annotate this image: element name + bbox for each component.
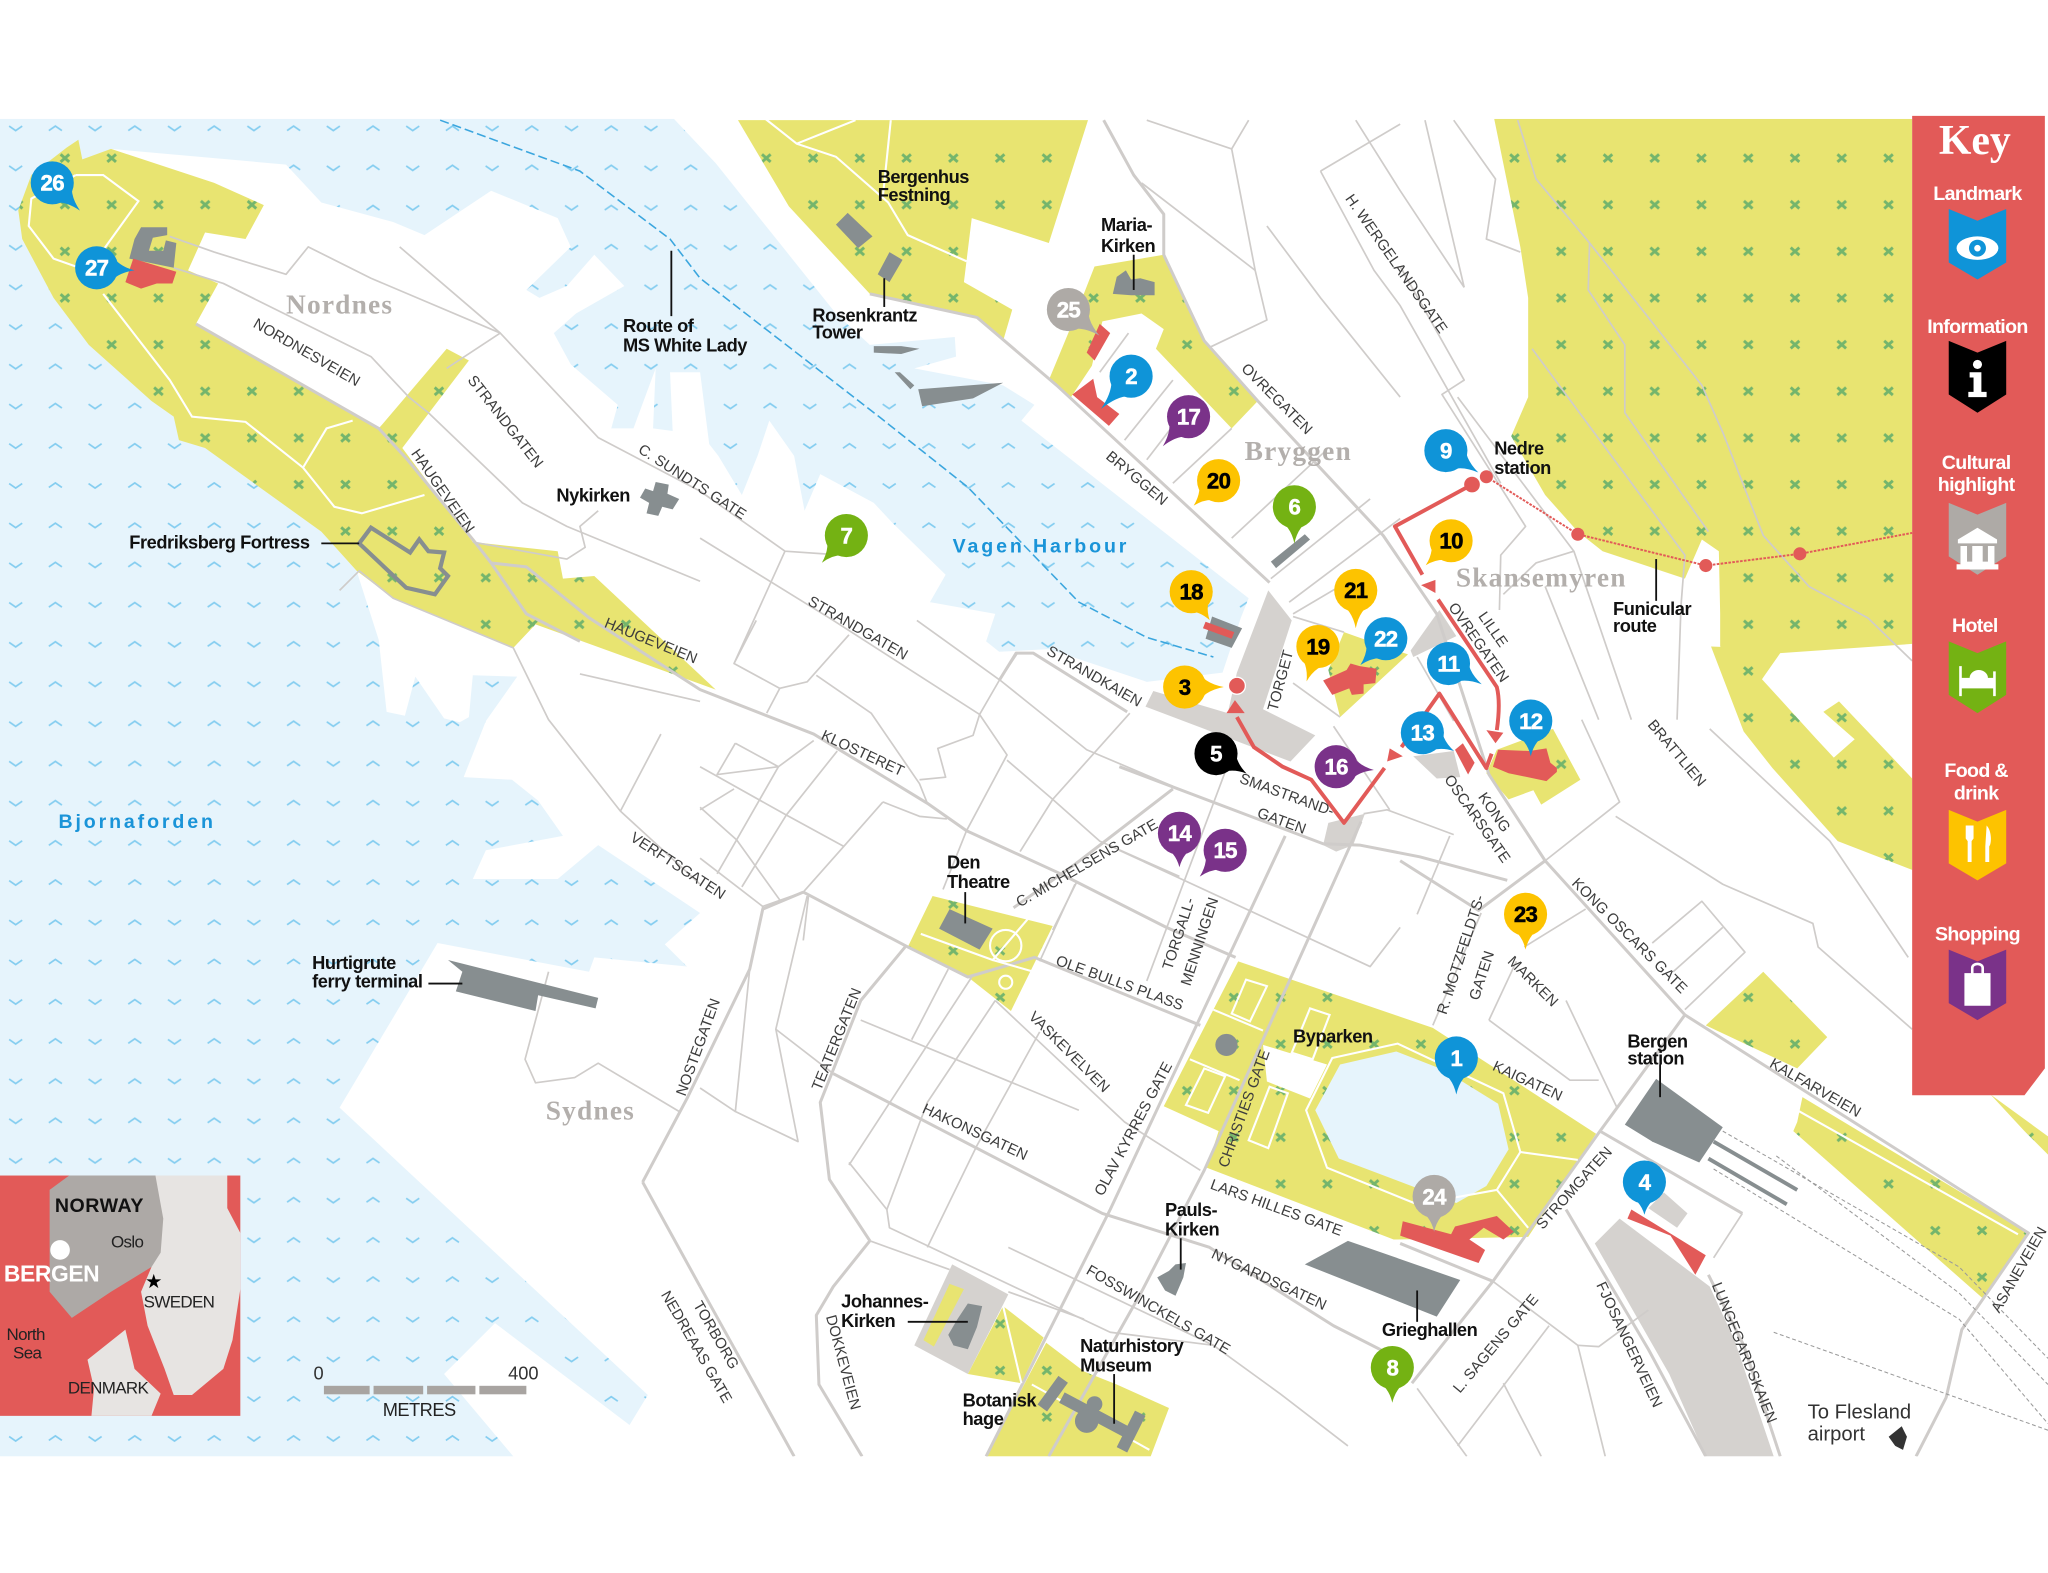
landmark labels: Festning bbox=[878, 184, 950, 205]
pin 12: 12 bbox=[1519, 709, 1543, 734]
street labels: C. SUNDTS GATE bbox=[635, 441, 749, 523]
key item: Landmark bbox=[1933, 183, 2022, 280]
street labels: R. MOTZFELDTS- bbox=[1434, 893, 1488, 1016]
street labels: KALFARVEIEN bbox=[1767, 1055, 1864, 1121]
street labels: BRATTLIEN bbox=[1644, 717, 1709, 790]
building: fish market grey bbox=[1206, 617, 1242, 648]
park: Bergenhus bbox=[738, 120, 1088, 341]
key item: Food and drink: Food & bbox=[1944, 760, 2008, 782]
Denmark bbox=[88, 1330, 161, 1416]
key item: Landmark: Landmark bbox=[1933, 183, 2022, 205]
landmark labels: Maria- bbox=[1101, 214, 1152, 235]
pin 8: 8 bbox=[1386, 1355, 1398, 1380]
place name labels: Bryggen bbox=[1245, 436, 1352, 466]
lake in Byparken bbox=[1315, 1051, 1509, 1203]
ferry route of MS White Lady bbox=[440, 120, 1213, 657]
pin 4: 4 bbox=[1639, 1170, 1652, 1195]
pin 7: 7 bbox=[841, 523, 853, 548]
pin 17: 17 bbox=[1177, 405, 1201, 430]
street labels: L. SAGENS GATE bbox=[1450, 1291, 1542, 1396]
street labels: OVREGATEN bbox=[1238, 360, 1316, 438]
street labels: LARS HILLES GATE bbox=[1208, 1176, 1345, 1240]
pin 22 bbox=[1347, 617, 1407, 678]
red highlighted buildings bbox=[125, 259, 1706, 1275]
street labels: MENNINGEN bbox=[1178, 895, 1222, 988]
street labels: NEDREAAS GATE bbox=[657, 1288, 735, 1406]
pin 24 bbox=[1413, 1175, 1456, 1232]
landmark labels: Tower bbox=[812, 321, 863, 342]
pin 4 bbox=[1623, 1161, 1666, 1215]
pin 19: 19 bbox=[1306, 634, 1330, 659]
pin 7 bbox=[808, 514, 868, 575]
street labels: OLAV KYRRES GATE bbox=[1091, 1059, 1176, 1199]
park: eastern hillside bbox=[1494, 119, 1912, 679]
street labels: LILLE bbox=[1474, 609, 1511, 651]
street labels: VERFTSGATEN bbox=[627, 829, 728, 903]
pin 16: 16 bbox=[1324, 755, 1348, 780]
yellow strip at Johannes-Kirken bbox=[923, 1284, 964, 1347]
key item: Cultural highlight: Cultural bbox=[1942, 452, 2011, 474]
park: block by 12 bbox=[1486, 729, 1580, 805]
station rails bbox=[1714, 1142, 1797, 1190]
pin 26: 26 bbox=[41, 171, 64, 196]
landmark labels: Johannes- bbox=[841, 1290, 929, 1311]
landmark labels: Byparken bbox=[1293, 1025, 1373, 1046]
street labels: HAKONSGATEN bbox=[920, 1100, 1030, 1164]
building: pier at 6 bbox=[1271, 534, 1310, 568]
building: Rosenkrantz Tower bbox=[878, 252, 903, 282]
icon: bag bbox=[1964, 963, 1991, 1006]
street labels: OLE BULLS PLASS bbox=[1054, 952, 1186, 1014]
Sweden label: SWEDEN bbox=[144, 1292, 214, 1311]
icon: plane bbox=[1889, 1426, 1907, 1450]
key item: Food and drink: drink bbox=[1954, 782, 1999, 804]
park: corner sliver bbox=[1991, 1095, 2048, 1155]
Bergen label: BERGEN bbox=[4, 1260, 99, 1286]
North Sea label: North bbox=[7, 1325, 45, 1344]
Sweden bbox=[141, 1176, 240, 1395]
airport note bbox=[1808, 1401, 1911, 1450]
street labels: OSCARSGATE bbox=[1440, 772, 1514, 866]
railway tracks dashed bbox=[1714, 1131, 2048, 1430]
street labels: SMASTRAND- bbox=[1237, 770, 1336, 820]
key item: Hotel: Hotel bbox=[1952, 615, 1998, 637]
park: Kalfarveien band bbox=[1793, 1097, 2028, 1298]
park: Nordnes peninsula bbox=[18, 140, 716, 690]
pin 23 bbox=[1504, 893, 1547, 950]
pin 11 bbox=[1427, 642, 1491, 700]
pin 21: 21 bbox=[1344, 578, 1368, 603]
roads bbox=[170, 120, 2028, 1456]
place name labels: Nordnes bbox=[286, 289, 393, 319]
building: Fredriksberg Fortress outline bbox=[359, 528, 448, 594]
street labels: HAUGEVEIEN bbox=[407, 446, 478, 536]
key item: Cultural highlight: highlight bbox=[1938, 474, 2016, 496]
star: Stockholm: ★ bbox=[145, 1271, 163, 1293]
landmark labels: route bbox=[1613, 615, 1657, 636]
station rails bbox=[1708, 1159, 1787, 1204]
landmark labels: station bbox=[1627, 1048, 1684, 1069]
street labels: FOSSWINCKELS GATE bbox=[1083, 1262, 1233, 1358]
street labels: VASKEVELVEN bbox=[1025, 1008, 1113, 1096]
grey buildings bbox=[129, 213, 1797, 1450]
pin 27: 27 bbox=[85, 256, 109, 281]
key panel bbox=[1912, 116, 2045, 1095]
pin 3: 3 bbox=[1179, 675, 1191, 700]
place name labels: Skansemyren bbox=[1456, 562, 1627, 592]
red walking route bbox=[1237, 485, 1499, 823]
pin 23: 23 bbox=[1514, 902, 1538, 927]
street labels: NYGARDSGATEN bbox=[1209, 1246, 1329, 1314]
place name labels bbox=[58, 289, 1627, 1125]
pin 10: 10 bbox=[1439, 529, 1463, 554]
pin 15: 15 bbox=[1213, 838, 1237, 863]
inset locator map: Sea bbox=[13, 1343, 43, 1362]
place name labels: Bjornaforden bbox=[58, 811, 216, 833]
water: fjord and harbour bbox=[0, 119, 1249, 1456]
landmark labels: Hurtigrute bbox=[312, 952, 396, 973]
landmark labels: Rosenkrantz bbox=[812, 304, 917, 325]
building: Naturhistory Museum bbox=[1042, 1379, 1140, 1450]
key item: Information bbox=[1927, 316, 2028, 413]
scale bar: 400 bbox=[508, 1362, 539, 1383]
pin 15 bbox=[1187, 829, 1247, 889]
street labels: STROMGATEN bbox=[1533, 1144, 1616, 1233]
ship 2 bbox=[918, 383, 1003, 406]
landmark labels: Bergen bbox=[1627, 1031, 1688, 1052]
landmark labels: Botanisk bbox=[963, 1390, 1037, 1411]
pin 9: 9 bbox=[1440, 438, 1452, 463]
landmark labels: Nedre bbox=[1494, 438, 1544, 459]
building: Den Theatre bbox=[939, 909, 993, 950]
street labels: KLOSTERET bbox=[819, 727, 907, 780]
pin 20 bbox=[1181, 459, 1240, 519]
key item: Cultural highlight bbox=[1938, 452, 2016, 575]
building: Nykirken bbox=[640, 482, 679, 516]
airport note: To Flesland bbox=[1808, 1401, 1911, 1423]
building: Maria-Kirken bbox=[1113, 270, 1155, 295]
pin 18 bbox=[1170, 570, 1225, 630]
pin 21 bbox=[1334, 569, 1377, 628]
icon: info bbox=[1968, 360, 1987, 397]
ship 3 bbox=[895, 372, 914, 389]
landmark labels: Kirken bbox=[841, 1310, 896, 1331]
route arrows bbox=[1226, 580, 1503, 761]
pin 14: 14 bbox=[1168, 821, 1192, 846]
street labels: GATEN bbox=[1466, 949, 1498, 1002]
street labels: LUNGEGARDSKAIEN bbox=[1708, 1280, 1780, 1426]
building: Johanneskirken bbox=[948, 1304, 982, 1349]
pin 19 bbox=[1289, 625, 1339, 687]
street labels bbox=[250, 191, 2048, 1426]
landmark labels: Bergenhus bbox=[878, 166, 969, 187]
street labels: STRANDGATEN bbox=[805, 593, 911, 664]
pin 25: 25 bbox=[1057, 297, 1080, 322]
pin 5: 5 bbox=[1210, 741, 1222, 766]
icon: eye bbox=[1957, 236, 1998, 260]
pin 3 bbox=[1163, 665, 1224, 709]
landmark labels: ferry terminal bbox=[312, 970, 423, 991]
building: fort at Nordnes bbox=[129, 227, 176, 268]
street labels: OVREGATEN bbox=[1445, 600, 1512, 686]
park: Botanisk hage bbox=[968, 1306, 1044, 1383]
landmark labels: Kirken bbox=[1165, 1219, 1219, 1240]
street labels: TORGET bbox=[1265, 648, 1297, 713]
Oslo label: Oslo bbox=[111, 1232, 144, 1251]
street labels: STRANDGATEN bbox=[464, 372, 546, 471]
pin 16 bbox=[1315, 745, 1375, 788]
building: Byparken pavilion bbox=[1215, 1034, 1238, 1056]
pin 17 bbox=[1149, 395, 1210, 458]
pin 9 bbox=[1424, 429, 1489, 488]
key item: Shopping bbox=[1935, 923, 2020, 1020]
landmark labels bbox=[129, 166, 1692, 1429]
park: hillside lower arm bbox=[1711, 647, 1912, 870]
pin 2: 2 bbox=[1125, 364, 1137, 389]
landmark labels: Naturhistory bbox=[1080, 1335, 1185, 1356]
Norway label: NORWAY bbox=[55, 1195, 144, 1217]
landmark labels: Fredriksberg Fortress bbox=[129, 532, 310, 553]
pin 11: 11 bbox=[1437, 651, 1460, 676]
Bergen dot bbox=[50, 1240, 70, 1260]
building: Grieghallen bbox=[1305, 1241, 1460, 1317]
Norway bbox=[50, 1176, 163, 1318]
pin 26 bbox=[31, 161, 93, 224]
key title: Key bbox=[1939, 118, 2011, 164]
street labels: NOSTEGATEN bbox=[673, 996, 724, 1098]
place name labels: Vagen Harbour bbox=[953, 536, 1129, 558]
landmark labels: Den bbox=[947, 852, 980, 873]
pin 2 bbox=[1088, 355, 1153, 421]
street labels: STRANDKAIEN bbox=[1044, 643, 1145, 711]
pin 20: 20 bbox=[1207, 469, 1231, 494]
scale bar bbox=[313, 1362, 539, 1420]
landmark labels: hage bbox=[963, 1408, 1004, 1429]
park: Kalfarveien triangle bbox=[1706, 972, 1827, 1068]
leader lines bbox=[321, 251, 1660, 1424]
pin 12 bbox=[1509, 699, 1552, 756]
landmark labels: Pauls- bbox=[1165, 1199, 1218, 1220]
pin 18: 18 bbox=[1179, 580, 1203, 605]
street labels: MARKEN bbox=[1504, 953, 1561, 1010]
key item: Hotel bbox=[1949, 615, 2006, 713]
street labels: GATEN bbox=[1255, 805, 1308, 838]
street labels: TEATERGATEN bbox=[809, 986, 865, 1093]
park: Byparken bbox=[1164, 961, 1596, 1240]
inset locator map bbox=[0, 1176, 240, 1416]
street labels: C. MICHELSENS GATE bbox=[1013, 816, 1161, 911]
route and funicular stations bbox=[1228, 470, 1806, 694]
grey plazas bbox=[914, 590, 1774, 1456]
pin 25 bbox=[1047, 288, 1111, 350]
park: Den Theatre bbox=[908, 896, 1053, 1011]
place name labels: Sydnes bbox=[546, 1095, 635, 1125]
building: Paulskirken bbox=[1157, 1263, 1186, 1296]
building: Hurtigrute terminal bbox=[448, 960, 598, 1011]
building: Bergenhus hall bbox=[836, 213, 872, 248]
icon: museum bbox=[1957, 528, 1998, 569]
landmark labels: Theatre bbox=[947, 871, 1010, 892]
pin 14 bbox=[1158, 812, 1201, 867]
park: Maria-Kirken bbox=[1049, 255, 1258, 428]
scale bar: METRES bbox=[383, 1399, 456, 1420]
street labels: KAIGATEN bbox=[1490, 1058, 1565, 1105]
key item: Information: Information bbox=[1927, 316, 2028, 338]
street labels: NORDNESVEIEN bbox=[250, 315, 363, 390]
street labels: HAUGEVEIEN bbox=[602, 615, 700, 667]
pin 6 bbox=[1273, 485, 1316, 543]
street labels: KONG OSCARS GATE bbox=[1568, 875, 1690, 997]
pin 27 bbox=[75, 246, 136, 289]
street labels: H. WERGELANDSGATE bbox=[1342, 191, 1451, 337]
street labels: TORGALL- bbox=[1159, 896, 1199, 972]
street labels: DOKKEVEIEN bbox=[822, 1313, 864, 1412]
pin 13: 13 bbox=[1411, 721, 1434, 746]
icon: cutlery bbox=[1966, 825, 1991, 862]
scale bar: 0 bbox=[313, 1362, 324, 1383]
landmark labels: Nykirken bbox=[556, 485, 630, 506]
pin 13 bbox=[1401, 711, 1463, 767]
white plaza in Byparken bbox=[1263, 1045, 1327, 1098]
landmark labels: station bbox=[1494, 457, 1551, 478]
Denmark label: DENMARK bbox=[68, 1379, 150, 1398]
street labels: TORBORG bbox=[689, 1298, 742, 1372]
pin 1: 1 bbox=[1450, 1046, 1462, 1071]
landmark labels: Route of bbox=[623, 315, 695, 336]
pin 10 bbox=[1413, 519, 1473, 578]
icon: bed bbox=[1959, 666, 1996, 696]
park: block by 19-22 bbox=[1328, 632, 1408, 717]
key item: Shopping: Shopping bbox=[1935, 923, 2020, 945]
building: Bergen station bbox=[1625, 1079, 1723, 1162]
funicular route bbox=[1486, 477, 1912, 566]
street labels: CHRISTIES GATE bbox=[1215, 1047, 1274, 1170]
pin 6: 6 bbox=[1289, 495, 1301, 520]
pin 5 bbox=[1194, 732, 1257, 789]
pin 22: 22 bbox=[1374, 627, 1398, 652]
landmark labels: Funicular bbox=[1613, 598, 1692, 619]
landmark labels: Kirken bbox=[1101, 235, 1155, 256]
landmark labels: Museum bbox=[1080, 1354, 1152, 1375]
landmark labels: MS White Lady bbox=[623, 334, 748, 355]
ship 1 bbox=[874, 346, 920, 354]
street labels: FJOSANGERVEIEN bbox=[1592, 1279, 1665, 1410]
landmark labels: Grieghallen bbox=[1382, 1319, 1478, 1340]
park: Naturhistory Museum bbox=[986, 1343, 1169, 1456]
pin 24: 24 bbox=[1422, 1184, 1447, 1209]
street labels: BRYGGEN bbox=[1102, 448, 1171, 509]
key item: Food and drink bbox=[1944, 760, 2008, 880]
pin 1 bbox=[1435, 1036, 1478, 1095]
airport note: airport bbox=[1808, 1424, 1865, 1446]
pin 8 bbox=[1371, 1346, 1414, 1403]
street labels: KONG bbox=[1474, 789, 1514, 835]
